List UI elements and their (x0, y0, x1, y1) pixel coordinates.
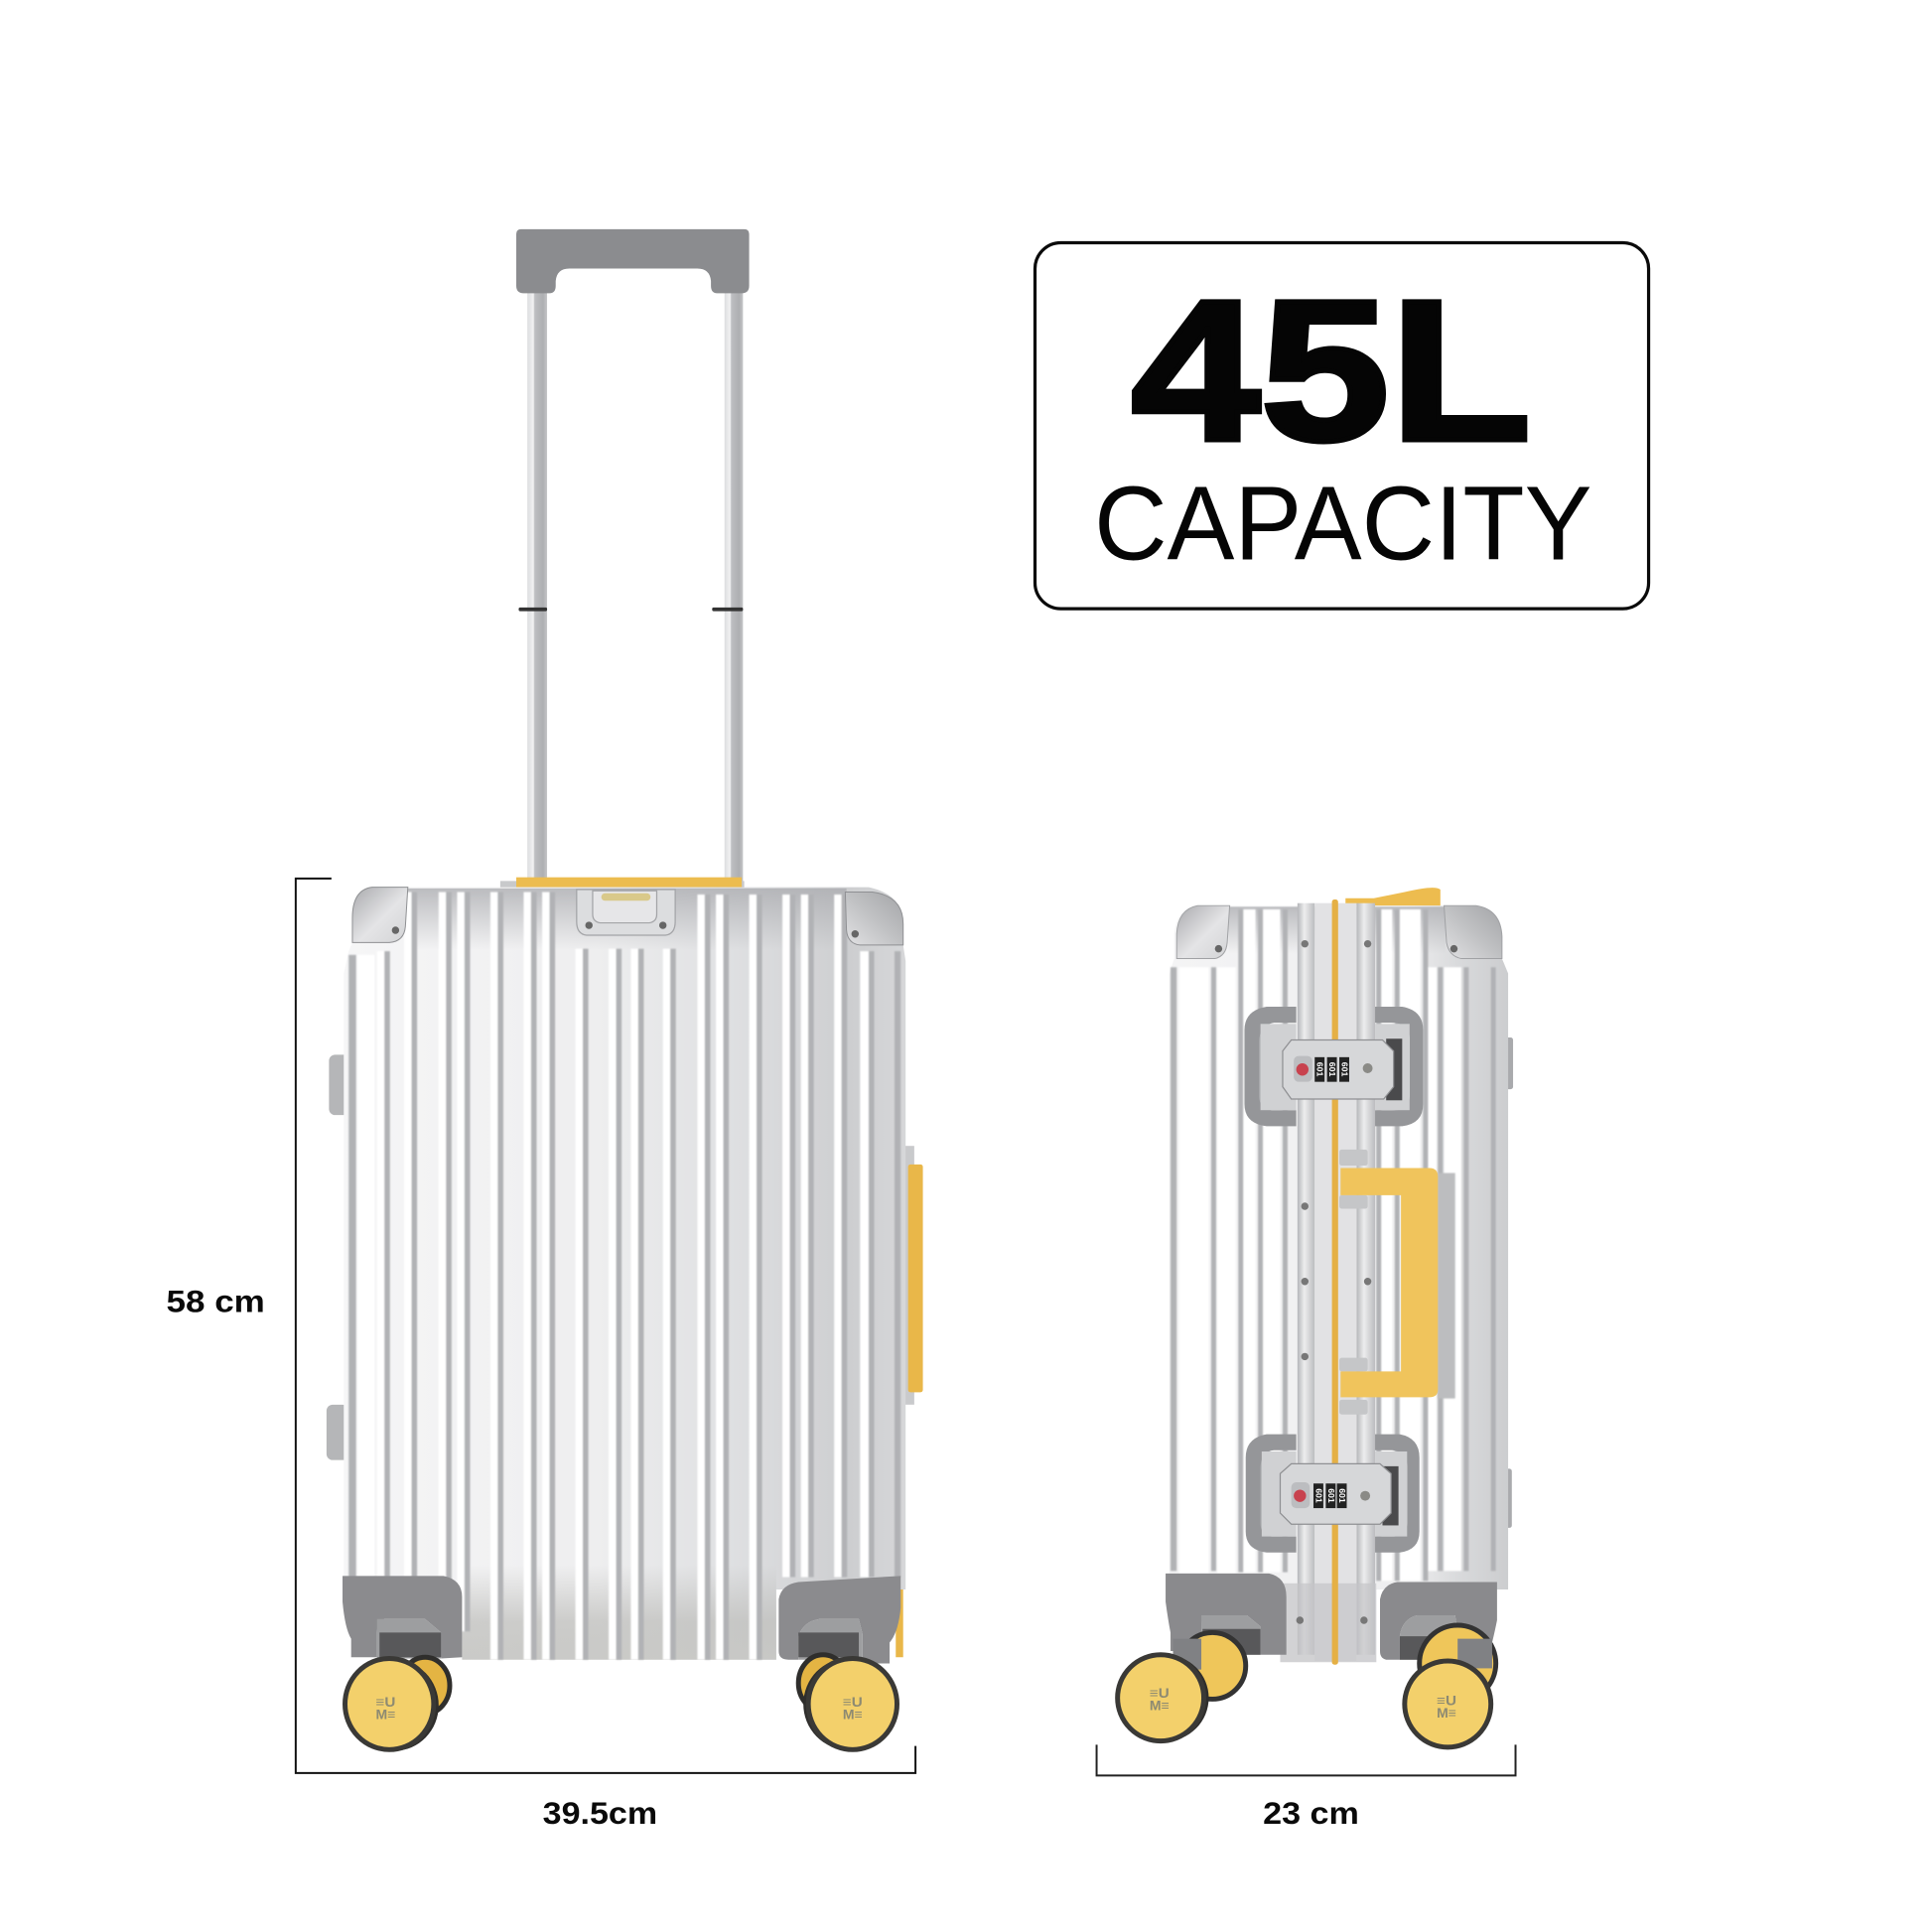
yellow zip seam (1332, 899, 1338, 1665)
left side latches (327, 1054, 351, 1460)
combination wheels: 601 (1337, 1488, 1347, 1503)
side ribs (1171, 909, 1496, 1581)
right yellow sliver (896, 1553, 903, 1657)
combination wheels: 601 (1313, 1488, 1323, 1503)
side right latches (1503, 1037, 1513, 1528)
height label: 58 cm (167, 1285, 265, 1319)
front right wheels (798, 1655, 897, 1749)
width label: 39.5cm (543, 1796, 657, 1831)
combination wheels: 601 (1340, 1062, 1350, 1076)
combination wheels: 601 (1315, 1062, 1325, 1076)
lower TSA lock (1280, 1463, 1391, 1524)
combination wheels (1313, 1483, 1347, 1508)
capacity label: CAPACITY (1094, 466, 1591, 582)
yellow top handle (500, 878, 745, 890)
wheel logo: ≡U (843, 1695, 863, 1710)
yellow carry handle (1339, 1150, 1455, 1415)
side view suitcase (1118, 888, 1513, 1747)
front left wheels (345, 1657, 450, 1751)
depth label: 23 cm (1263, 1796, 1359, 1831)
combination wheels: 601 (1326, 1488, 1336, 1503)
vertical ribs (348, 893, 900, 1660)
top corner caps (352, 888, 903, 945)
side top handle (1345, 888, 1441, 905)
side dimension bracket (1097, 1744, 1516, 1775)
side left wheels (1118, 1632, 1246, 1741)
body shell (344, 888, 905, 1660)
right side handle (903, 1146, 923, 1405)
front view suitcase (327, 229, 923, 1751)
side body shell (1170, 905, 1508, 1662)
top latch plate (577, 890, 675, 935)
telescopic handle (516, 229, 750, 885)
upper TSA lock (1283, 1039, 1394, 1099)
combination wheels (1314, 1057, 1350, 1082)
front dimension bracket (296, 879, 915, 1773)
side right wheels: M≡ (1437, 1706, 1456, 1721)
side bottom guards (1166, 1574, 1497, 1665)
front right wheels: M≡ (843, 1707, 863, 1722)
lower lock recess (1246, 1435, 1420, 1553)
wheel logo: ≡U (1150, 1686, 1170, 1701)
top and bottom shading (407, 889, 847, 950)
upper lock recess (1244, 1007, 1423, 1126)
side right wheels (1405, 1625, 1496, 1747)
capacity badge (1035, 242, 1649, 609)
bottom corner guards (343, 1576, 900, 1663)
side frame rivets (1297, 940, 1371, 1624)
capacity value: 45L (1131, 258, 1532, 483)
combination wheels: 601 (1327, 1062, 1337, 1076)
side left wheels: M≡ (1150, 1699, 1170, 1714)
side centre frame (1280, 903, 1376, 1662)
front left wheels: M≡ (376, 1707, 395, 1722)
wheel logo: ≡U (1437, 1694, 1456, 1709)
side top corners (1176, 905, 1502, 959)
wheel logo: ≡U (376, 1695, 396, 1710)
